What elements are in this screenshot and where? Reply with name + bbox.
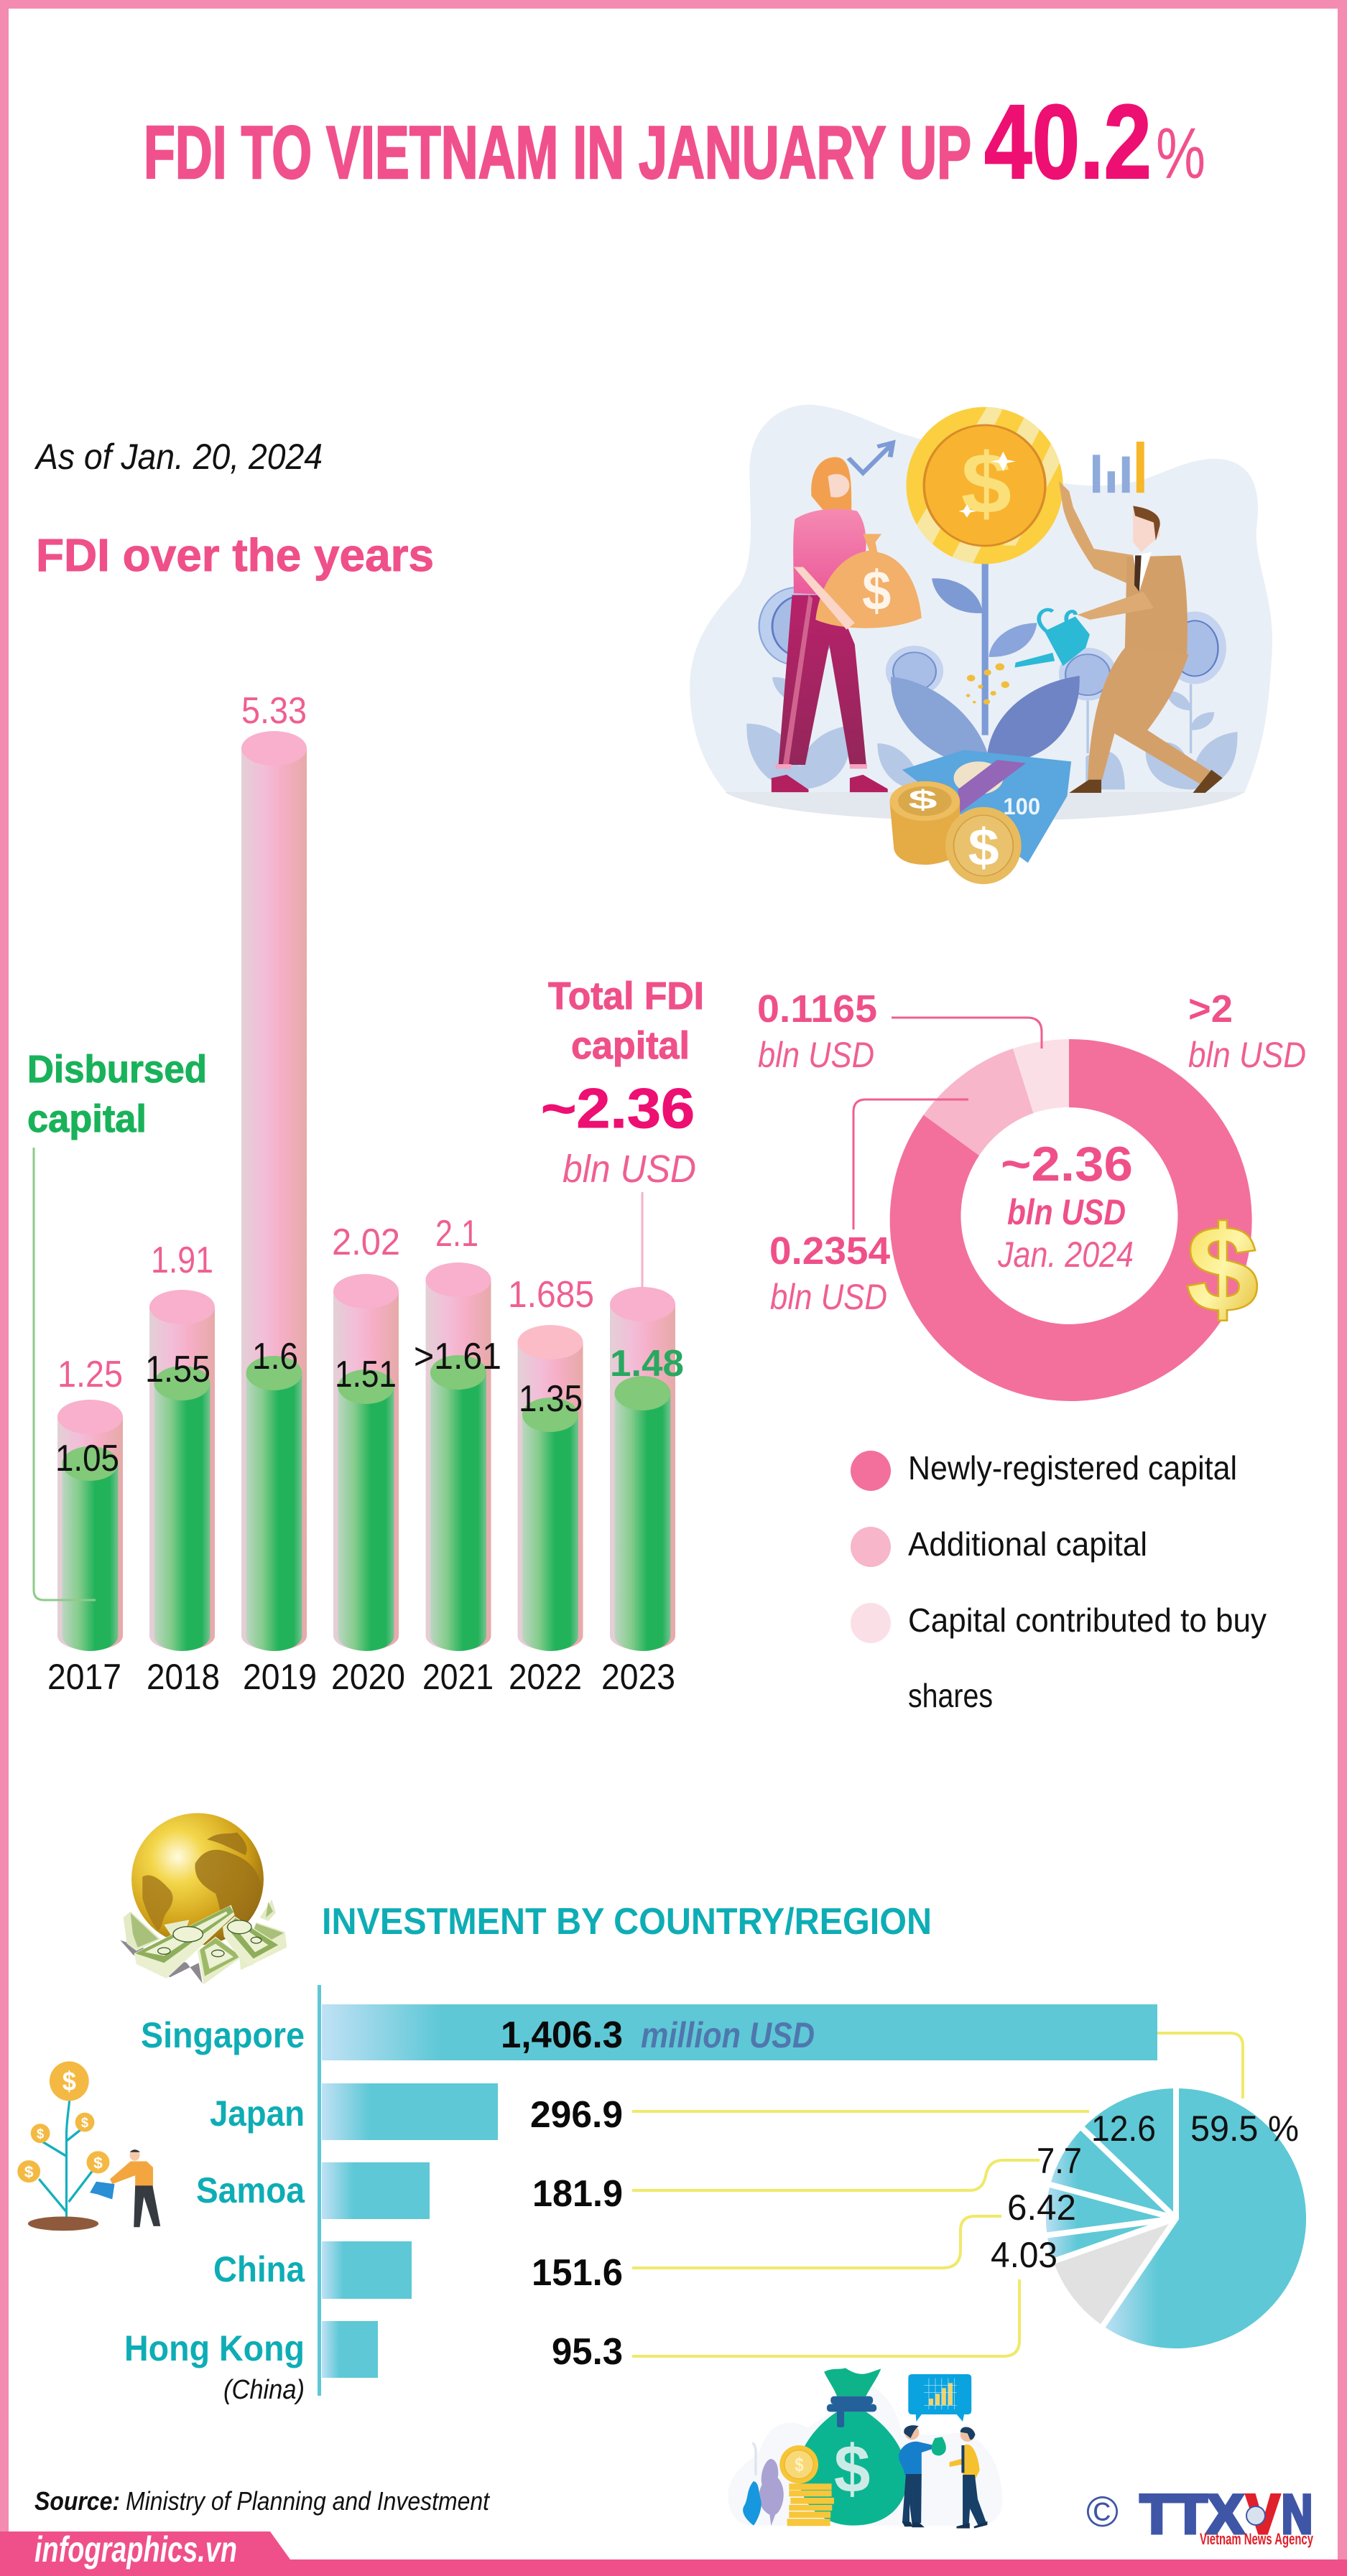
segment: newly-registered capital (890, 1039, 1252, 1401)
disbursed capital values: 1.51 (335, 1354, 397, 1395)
disbursed capital values: 1.05 (55, 1438, 119, 1479)
legend: capital types (851, 1449, 1267, 1714)
bag: $ (834, 2431, 870, 2506)
total capital values: 1.685 (508, 1274, 594, 1316)
year labels: 2023 (601, 1657, 675, 1697)
cylinder 2022 (517, 1325, 583, 1651)
tree: $ (63, 2067, 76, 2096)
legend: capital types: Newly-registered capital (908, 1449, 1237, 1487)
icon: man in brown suit (1059, 481, 1223, 793)
icon: background blob (690, 405, 1272, 793)
year labels: 2021 (422, 1657, 494, 1697)
logo: TTXVN Vietnam News Agency: © (1086, 2488, 1119, 2536)
donut centre label (997, 1137, 1134, 1275)
callout: newly-registered value: bln USD (1188, 1035, 1306, 1075)
bar chart: FDI over the years (47, 690, 684, 1697)
illustration: people watering money plant (690, 401, 1272, 884)
pie chart: share by country (1043, 2086, 1309, 2351)
disbursed capital values (55, 1336, 684, 1479)
icon: cash and coins: 100 (1003, 794, 1040, 819)
callout: additional capital value: 0.2354 (769, 1229, 890, 1273)
investment values (501, 2014, 623, 2373)
icon: cash and coins (890, 750, 1071, 884)
legend: capital types: shares (908, 1677, 993, 1714)
investment values: 95.3 (552, 2331, 623, 2373)
slice Hong Kong (1045, 2218, 1176, 2262)
source: Source: (34, 2486, 120, 2516)
icon: large gold coin (907, 401, 1065, 569)
unit label: million USD (641, 2015, 815, 2055)
speech bubble chart (908, 2374, 971, 2422)
investment values: 296.9 (530, 2094, 623, 2136)
icon: watering can (1014, 610, 1090, 668)
tree: $ (24, 2163, 34, 2181)
investor in blue (899, 2425, 946, 2527)
disbursed capital values: 1.6 (252, 1336, 298, 1377)
callout: newly-registered value: >2 (1188, 987, 1233, 1031)
callout: additional capital value: bln USD (770, 1277, 887, 1317)
coins: $ (795, 2454, 804, 2475)
callout: disbursed capital: capital (27, 1097, 147, 1140)
donut centre label: ~2.36 (1001, 1137, 1133, 1191)
cylinder 2021 (425, 1263, 491, 1651)
title: FDI TO VIETNAM IN JANUARY UP (144, 111, 971, 195)
slice Samoa (1047, 2126, 1176, 2218)
country labels: Samoa (196, 2170, 305, 2210)
bar chart: investment by country (124, 1985, 1157, 2405)
segment: additional capital (924, 1048, 1033, 1156)
year labels (47, 1657, 675, 1697)
heading: FDI over the years: FDI over the years (36, 529, 434, 581)
coins (779, 2445, 834, 2526)
bar Samoa (322, 2162, 430, 2219)
country labels (124, 2015, 305, 2368)
cash stacks (120, 1900, 287, 1984)
cylinder 2023 (610, 1287, 675, 1651)
slice China (1043, 2184, 1176, 2236)
bar Japan (322, 2083, 498, 2140)
investment values: 181.9 (532, 2173, 623, 2215)
illustration: money bag and investors (728, 2368, 1003, 2527)
pie percentage labels: 12.6 (1091, 2108, 1156, 2149)
disbursed capital values: 1.48 (610, 1343, 684, 1385)
footer tab: infographics.vn (34, 2529, 237, 2570)
bar China (322, 2241, 412, 2299)
icon: plant stem and leaves (891, 560, 1080, 767)
pie percentage labels: 7.7 (1037, 2141, 1082, 2181)
year labels: 2017 (47, 1657, 121, 1697)
investment values: 1,406.3 (501, 2014, 623, 2056)
icon: background leaves (746, 677, 1238, 789)
country labels: Japan (210, 2093, 305, 2134)
bar Hong Kong (322, 2321, 378, 2378)
cylinder 2020 (333, 1274, 399, 1651)
tree: $ (93, 2154, 103, 2172)
icon: gold globe on cash (120, 1813, 287, 1984)
icon: woman holding money bag (772, 457, 922, 792)
callout: additional capital value (769, 1099, 968, 1317)
total capital values (57, 690, 594, 1395)
donut centre label: Jan. 2024 (997, 1234, 1134, 1275)
callout: newly-registered value (1188, 987, 1306, 1075)
callout: total FDI capital: Total FDI (548, 975, 704, 1018)
year labels: 2022 (509, 1657, 582, 1697)
country labels: Singapore (141, 2015, 305, 2055)
icon: woman holding money bag: $ (862, 559, 891, 622)
connector lines (632, 2033, 1243, 2356)
total capital values: 5.33 (241, 690, 307, 732)
logo: TTXVN Vietnam News Agency: V (1246, 2484, 1279, 2545)
year labels: 2020 (331, 1657, 405, 1697)
total capital values: 2.02 (332, 1222, 400, 1263)
donut centre label: bln USD (1007, 1192, 1126, 1232)
slice Singapore (1101, 2086, 1309, 2351)
disbursed capital values: >1.61 (414, 1336, 501, 1377)
total capital values: 2.1 (435, 1213, 478, 1255)
cylinder 2019 (241, 731, 307, 1651)
globe (131, 1813, 264, 1945)
icon: mini bars (1093, 442, 1144, 493)
cylinder 2018 (149, 1290, 215, 1651)
donut chart (890, 1039, 1258, 1401)
investor in yellow (950, 2427, 986, 2527)
tree: $ (81, 2114, 89, 2130)
pie percentage labels: 59.5 % (1190, 2108, 1299, 2149)
callout: shares capital value: bln USD (758, 1035, 874, 1075)
cylinder 2017 (57, 1400, 123, 1651)
Hong Kong sub label: (China) (223, 2375, 305, 2405)
legend: capital types: Capital contributed to buy (908, 1601, 1267, 1639)
year labels: 2018 (147, 1657, 220, 1697)
heading: investment by country: INVESTMENT BY COUNTRY/REGION (322, 1901, 932, 1943)
legend: capital types: Additional capital (908, 1525, 1147, 1563)
source: Ministry of Planning and Investment (126, 2486, 491, 2516)
title: % (1156, 113, 1205, 194)
icon: cash and coins: $ (908, 784, 938, 814)
axis (318, 1985, 321, 2396)
tree: $ (37, 2126, 45, 2142)
year labels: 2019 (243, 1657, 317, 1697)
callout: disbursed capital (27, 1048, 207, 1600)
country labels: Hong Kong (124, 2328, 305, 2368)
callout: disbursed capital: Disbursed (27, 1048, 207, 1091)
icon: money tree and gardener (17, 2061, 160, 2231)
date note: As of Jan. 20, 2024 (34, 437, 323, 477)
logo: TTXVN Vietnam News Agency: TTX (1140, 2484, 1244, 2545)
country labels: China (213, 2249, 305, 2289)
icon: ground (725, 792, 1244, 821)
gardener (90, 2149, 160, 2227)
disbursed capital values: 1.35 (519, 1378, 583, 1420)
title: 40.2 (984, 83, 1152, 201)
bar Singapore (322, 2004, 1157, 2060)
callout: shares capital value: 0.1165 (757, 987, 877, 1031)
icon: trend arrow (848, 442, 893, 473)
logo: TTXVN Vietnam News Agency (1086, 2484, 1314, 2548)
logo: TTXVN Vietnam News Agency: N (1282, 2484, 1313, 2545)
slice other (1050, 2218, 1176, 2328)
slice Japan (1080, 2086, 1176, 2218)
plants (743, 2443, 784, 2526)
icon: blue back coins (759, 587, 1226, 753)
icon: cash and coins: $ (968, 818, 999, 877)
tree (17, 2061, 109, 2231)
callout: shares capital value (757, 987, 1042, 1075)
total capital values: 1.25 (57, 1354, 123, 1395)
callout: total FDI capital: bln USD (563, 1148, 696, 1191)
pie percentage labels: 4.03 (991, 2235, 1057, 2275)
total capital values: 1.91 (151, 1240, 213, 1281)
pie percentage labels (991, 2108, 1299, 2275)
investment values: 151.6 (532, 2252, 623, 2294)
segment: capital to buy shares (1013, 1039, 1069, 1113)
callout: total FDI capital: ~2.36 (541, 1077, 695, 1140)
backdrop (728, 2386, 1003, 2526)
callout: total FDI capital: capital (571, 1024, 690, 1067)
pie percentage labels: 6.42 (1007, 2187, 1076, 2228)
title (144, 83, 1205, 201)
disbursed capital values: 1.55 (145, 1349, 210, 1390)
icon: gold dollar: $ (1187, 1201, 1258, 1336)
callout: total FDI capital (541, 975, 704, 1288)
bag (798, 2368, 907, 2526)
icon: large gold coin: $ (961, 436, 1012, 531)
